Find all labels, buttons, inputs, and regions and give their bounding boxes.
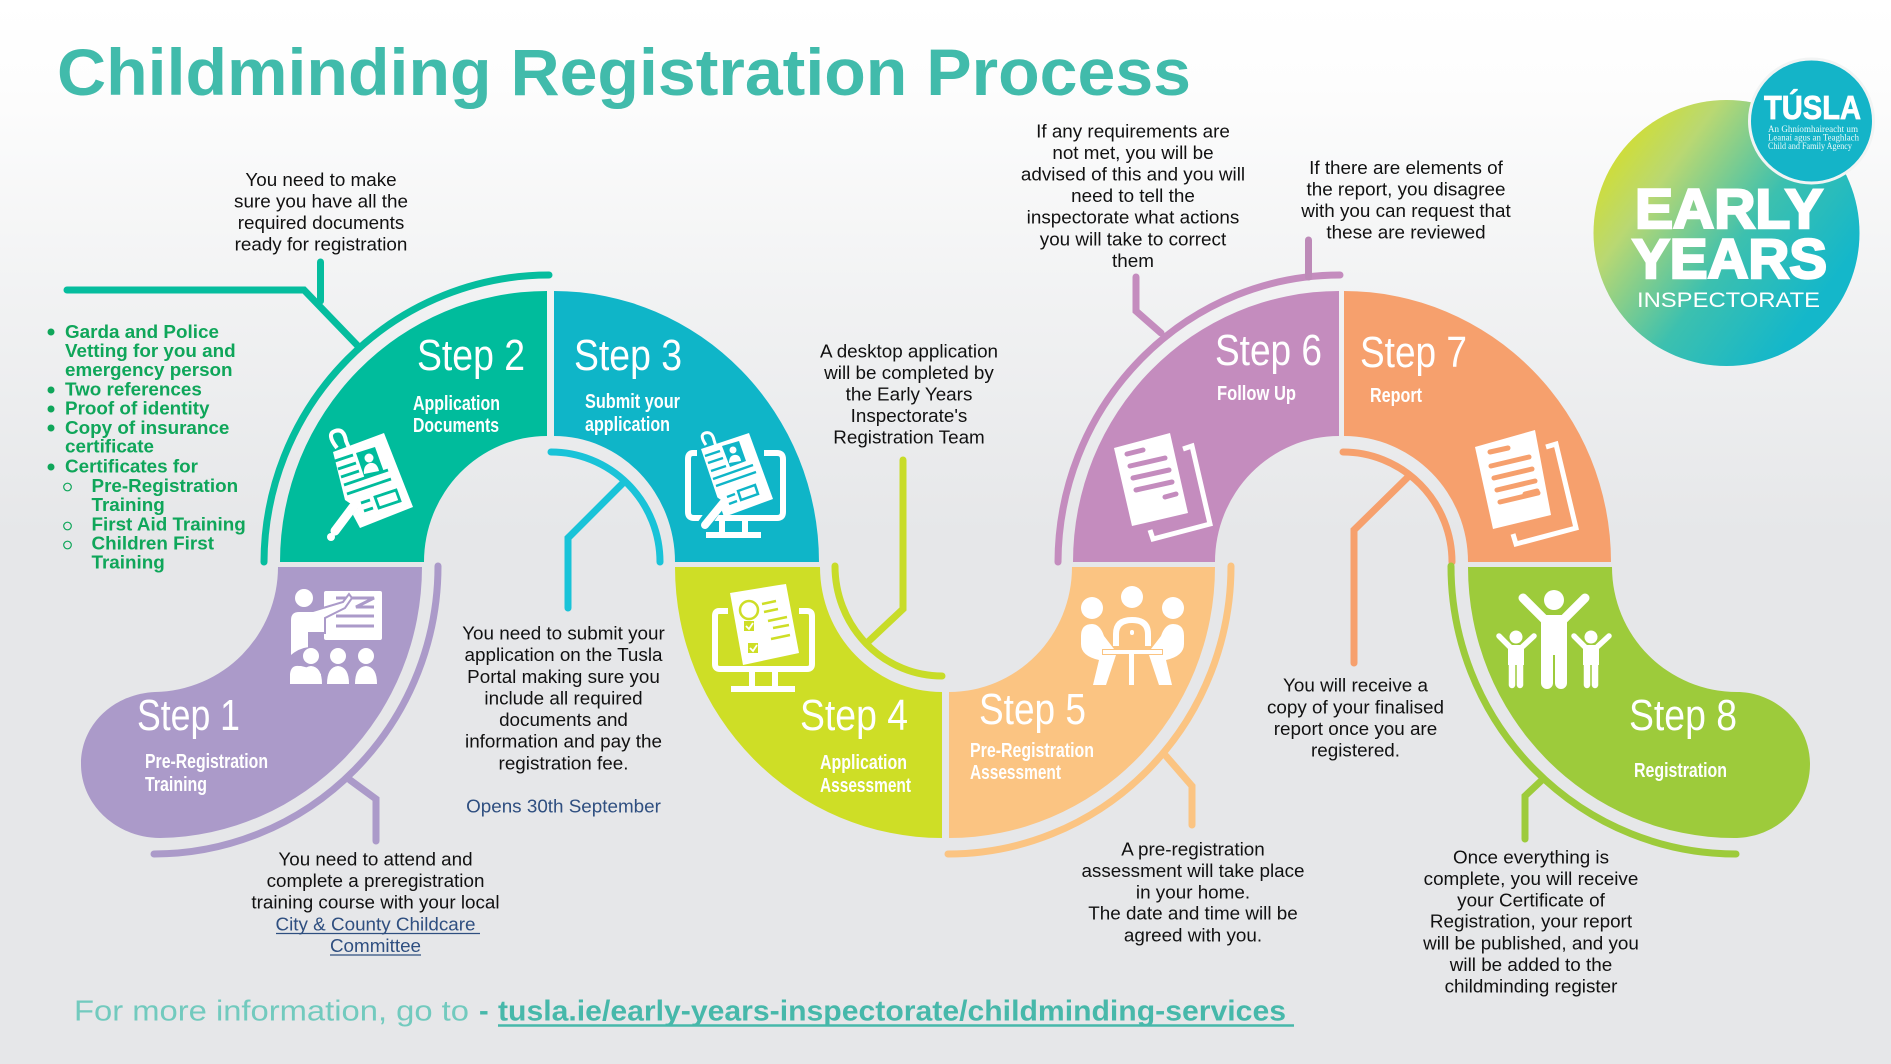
text: step 8 note: will be added to the (1449, 954, 1612, 975)
logo badge: Tusla: Leanaí agus an Teaghlach (1768, 132, 1859, 142)
text: step 3 note: information and pay the (465, 730, 662, 752)
step 6 band (1073, 291, 1339, 562)
step 2 band (280, 291, 547, 562)
text: step 1 note: complete a preregistration (267, 870, 484, 891)
footer: more information link: For more information, go to (74, 996, 469, 1028)
text: step 6 review note: the report, you disagree (1306, 178, 1506, 200)
panel: step 6 follow up (1073, 291, 1339, 562)
step 5 band (949, 567, 1215, 838)
text: step 1 note: training course with your local (251, 892, 500, 912)
step 8 heading: Step 8 (1629, 691, 1737, 740)
title: Childminding Registration Process (57, 35, 1191, 109)
step 8 band (1468, 567, 1810, 838)
link: childcare committee (275, 914, 480, 956)
link: childcare committee: Committee (330, 935, 421, 956)
step 3 heading: Step 3 (574, 331, 682, 380)
text: step 3 note: You need to submit your (462, 622, 665, 644)
text: step 4 note: Inspectorate's (851, 405, 967, 426)
callout line: step 7 upper (1305, 240, 1312, 277)
text: step 3 note: include all required (484, 688, 643, 708)
text: step 6 note: If any requirements are (1036, 120, 1230, 142)
text: step 5 note: assessment will take place (1081, 860, 1305, 881)
step 6 label: Follow Up (1217, 383, 1296, 405)
icon: adult and two children (1499, 590, 1609, 685)
list text: Copy of insurance (65, 417, 229, 438)
text: step 3 note: registration fee. (499, 752, 628, 774)
list text: Garda and Police (65, 321, 219, 342)
text: step 4 note: A desktop application (820, 340, 998, 362)
text: step 7 note: report once you are (1274, 718, 1437, 739)
step 5 label: Assessment (970, 762, 1061, 784)
list text: Vetting for you and (65, 340, 236, 361)
arc: step 8 (1451, 566, 1736, 854)
callout line: step 4 (869, 460, 903, 641)
text: step 8 note: will be published, and you (1422, 932, 1639, 954)
step 1 heading: Step 1 (137, 691, 240, 740)
step 1 label: Training (145, 774, 207, 796)
text: step 3 note: application on the Tusla (464, 644, 663, 665)
step 8 label: Registration (1634, 760, 1727, 782)
step 7 label: Report (1370, 385, 1422, 407)
step 7 heading: Step 7 (1360, 328, 1467, 377)
text: step 8 note: childminding register (1445, 976, 1617, 996)
list text: Training (92, 552, 165, 572)
link: childcare committee: City & County Childcare (275, 914, 476, 934)
step 6 heading: Step 6 (1215, 326, 1322, 375)
text: step 2 note: required documents (238, 212, 404, 233)
logo badge: Tusla: An Ghníomhaireacht um (1768, 124, 1858, 134)
logo badge: Tusla: TÚSLA (1764, 89, 1861, 126)
text: step 8 note: your Certificate of (1457, 890, 1606, 910)
icon: application document with pencil (327, 430, 413, 541)
icon: people meeting at a table (1081, 586, 1184, 685)
step 7 band (1344, 291, 1611, 562)
panel: step 4 application assessment (675, 567, 942, 838)
step 3 band (554, 291, 819, 562)
footer: more information link: - (479, 996, 489, 1028)
step 1 band (81, 567, 422, 838)
text: step 6 review note: these are reviewed (1326, 222, 1486, 242)
step 3 label: Submit your (585, 391, 680, 413)
text: step 6 note: inspectorate what actions (1027, 206, 1239, 228)
list text: emergency person (65, 359, 233, 380)
icon: stacked report documents (1475, 430, 1576, 544)
list text: Pre-Registration (92, 475, 238, 496)
step 4 label: Application (820, 752, 907, 774)
text: step 5 note: The date and time will be (1088, 902, 1298, 924)
list text: Training (92, 494, 165, 515)
text: step 2 note: ready for registration (235, 234, 407, 254)
text: step 6 note: you will take to correct (1040, 228, 1227, 250)
list text: certificate (65, 436, 154, 456)
step 4 heading: Step 4 (800, 691, 908, 740)
text: step 4 note: the Early Years (846, 384, 972, 404)
icon: monitor with application document (688, 433, 783, 538)
text: step 5 note: in your home. (1136, 882, 1250, 902)
arc: step 5 (948, 566, 1231, 854)
text: step 8 note: Once everything is (1453, 846, 1609, 868)
text: step 3 note: Portal making sure you (467, 666, 660, 687)
panel: step 8 registration (1468, 567, 1810, 838)
logo badge: Tusla: Child and Family Agency (1768, 141, 1852, 151)
bullets (48, 328, 71, 549)
text: step 6 note: need to tell the (1071, 185, 1195, 206)
list text: First Aid Training (92, 514, 246, 534)
callout line: step 3 (568, 483, 623, 608)
panel: step 3 submit your application (554, 291, 819, 562)
logo: early years inspectorate (1594, 59, 1874, 366)
arc: step 4 (835, 566, 942, 676)
step 1 label: Pre-Registration (145, 751, 268, 773)
footer: more information link: tusla.ie/early-years-inspectorate/childminding-services (498, 996, 1286, 1028)
list text: Children First (92, 532, 215, 554)
text: step 4 note: will be completed by (823, 362, 994, 383)
logo wordmark: YEARS (1632, 227, 1827, 290)
panel: step 2 application documents (280, 291, 547, 562)
callout line: step 7 (1354, 477, 1408, 663)
text: step 5 note: A pre-registration (1121, 838, 1265, 860)
list text: Two references (65, 378, 202, 400)
logo subtitle: INSPECTORATE (1637, 289, 1820, 312)
text: step 2 note: sure you have all the (234, 190, 408, 212)
panel: step 1 pre-registration training (81, 567, 422, 838)
callout line: step 5 (1166, 756, 1192, 825)
step 2 label: Documents (413, 415, 499, 437)
footer: more information link (74, 996, 1294, 1028)
list text: Proof of identity (65, 398, 210, 418)
logo wordmark: EARLY (1635, 177, 1823, 240)
logo badge: Tusla (1750, 59, 1874, 183)
arc: step 7 (1343, 452, 1452, 562)
text: step 7 note: registered. (1311, 740, 1400, 760)
text: step 8 note: complete, you will receive (1424, 868, 1638, 889)
step 2 heading: Step 2 (417, 331, 525, 380)
panel: step 5 pre-registration assessment (949, 567, 1215, 838)
step 3 label: application (585, 414, 670, 436)
icon: stacked documents (1114, 433, 1210, 539)
text: step 6 review note: with you can request that (1300, 200, 1512, 221)
text: step 2 note: You need to make (245, 169, 397, 190)
list text: Certificates for (65, 456, 199, 476)
step 5 label: Pre-Registration (970, 740, 1094, 762)
step 5 heading: Step 5 (979, 685, 1086, 734)
arc: step 2 (264, 275, 549, 562)
text: step 7 note: You will receive a (1283, 674, 1428, 696)
callout line: step 2 (67, 262, 357, 345)
text: step 7 note: copy of your finalised (1267, 696, 1444, 718)
panel: step 7 report (1344, 291, 1611, 562)
text: step 6 note: not met, you will be (1052, 142, 1214, 163)
step 2 label: Application (413, 393, 500, 415)
list: required documents (48, 321, 246, 572)
text: step 5 note: agreed with you. (1124, 924, 1262, 946)
arc: step 6 (1058, 275, 1340, 562)
callout line: step 8 (1525, 780, 1542, 839)
step 4 band (675, 567, 942, 838)
icon: trainer and audience (290, 589, 382, 684)
text: step 6 review note: If there are elements of (1309, 157, 1504, 178)
arc: step 1 (154, 566, 438, 854)
arc: step 3 (551, 452, 660, 562)
text: step 1 note: You need to attend and (278, 848, 473, 870)
text: step 6 note: them (1112, 250, 1154, 271)
text: step 3 note: documents and (499, 709, 628, 730)
step 4 label: Assessment (820, 775, 911, 797)
text: step 8 note: Registration, your report (1430, 910, 1633, 932)
text: step 4 note: Registration Team (833, 426, 985, 448)
text: step 6 note: advised of this and you will (1021, 164, 1245, 184)
text: opening date: Opens 30th September (466, 796, 661, 816)
callout line: step 6 (1136, 277, 1161, 333)
callout line: step 1 (350, 780, 376, 841)
icon: monitor with checklist (715, 584, 812, 692)
